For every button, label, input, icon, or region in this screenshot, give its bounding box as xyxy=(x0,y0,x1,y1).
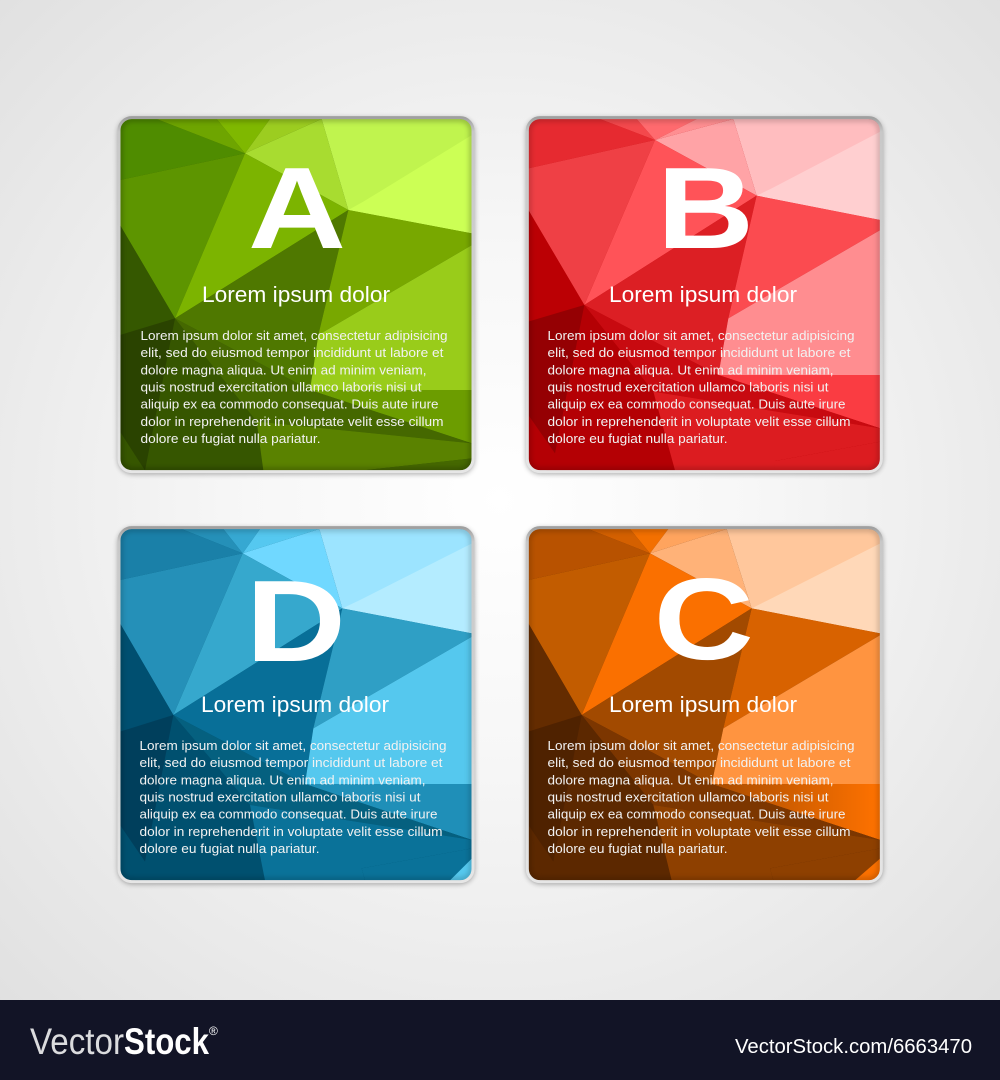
card C polygon art and frame xyxy=(527,528,882,884)
body text B: aliquip ex ea commodo consequat. Duis aute irure xyxy=(548,398,846,412)
image id: VectorStock.com/6663470 xyxy=(735,1036,972,1058)
card D polygon art and frame xyxy=(118,528,474,884)
card B polygon art and frame xyxy=(527,118,882,474)
panel: B red card xyxy=(527,118,882,474)
body text D: dolore magna aliqua. Ut enim ad minim veniam, xyxy=(140,774,426,788)
body text D xyxy=(140,739,447,856)
heading C: Lorem ipsum dolor xyxy=(609,692,797,717)
footer bar xyxy=(0,1000,1000,1080)
letter D: D xyxy=(246,557,346,686)
panel: D blue card xyxy=(118,528,474,884)
letter A: A xyxy=(248,143,346,273)
body text B: quis nostrud exercitation ullamco laboris nisi ut xyxy=(548,380,829,394)
heading B: Lorem ipsum dolor xyxy=(609,282,797,307)
body text A: quis nostrud exercitation ullamco laboris nisi ut xyxy=(140,380,422,394)
card A polygon art and frame xyxy=(118,118,474,474)
body text C: aliquip ex ea commodo consequat. Duis aute irure xyxy=(548,808,846,822)
body text D: quis nostrud exercitation ullamco laboris nisi ut xyxy=(140,790,421,804)
body text B: dolor in reprehenderit in voluptate velit esse cillum xyxy=(548,415,850,429)
letter B: B xyxy=(657,143,754,273)
body text A: aliquip ex ea commodo consequat. Duis aute irure xyxy=(140,398,439,412)
body text A: elit, sed do eiusmod tempor incididunt ut labore et xyxy=(140,346,444,360)
heading D: Lorem ipsum dolor xyxy=(201,692,389,717)
body text A: dolor in reprehenderit in voluptate velit esse cillum xyxy=(140,415,444,429)
body text C: Lorem ipsum dolor sit amet, consectetur adipisicing xyxy=(548,739,855,753)
body text A: dolore magna aliqua. Ut enim ad minim veniam, xyxy=(140,364,426,378)
VectorStock logo: ® xyxy=(209,1024,218,1038)
heading A: Lorem ipsum dolor xyxy=(202,282,390,307)
body text D: dolore eu fugiat nulla pariatur. xyxy=(140,842,320,856)
body text B: elit, sed do eiusmod tempor incididunt ut labore et xyxy=(548,346,851,360)
body text C: dolor in reprehenderit in voluptate velit esse cillum xyxy=(548,825,850,839)
body text D: Lorem ipsum dolor sit amet, consectetur adipisicing xyxy=(140,739,447,753)
body text B: dolore eu fugiat nulla pariatur. xyxy=(548,432,728,446)
VectorStock logo: VectorStock xyxy=(30,1021,225,1062)
body text A: Lorem ipsum dolor sit amet, consectetur adipisicing xyxy=(140,329,448,343)
body text B: dolore magna aliqua. Ut enim ad minim veniam, xyxy=(548,364,834,378)
panel: A green card xyxy=(118,118,474,474)
letter C: C xyxy=(654,555,754,684)
body text A: dolore eu fugiat nulla pariatur. xyxy=(140,432,320,446)
body text C: quis nostrud exercitation ullamco laboris nisi ut xyxy=(548,790,829,804)
body text D: aliquip ex ea commodo consequat. Duis aute irure xyxy=(140,808,438,822)
body text C xyxy=(548,739,855,856)
body text D: elit, sed do eiusmod tempor incididunt ut labore et xyxy=(140,756,443,770)
body text C: dolore magna aliqua. Ut enim ad minim veniam, xyxy=(548,774,834,788)
body text A xyxy=(140,329,448,446)
body text B xyxy=(548,329,855,446)
body text D: dolor in reprehenderit in voluptate velit esse cillum xyxy=(140,825,442,839)
body text C: elit, sed do eiusmod tempor incididunt ut labore et xyxy=(548,756,851,770)
panel: C orange card xyxy=(527,528,882,884)
body text C: dolore eu fugiat nulla pariatur. xyxy=(548,842,728,856)
body text B: Lorem ipsum dolor sit amet, consectetur adipisicing xyxy=(548,329,855,343)
